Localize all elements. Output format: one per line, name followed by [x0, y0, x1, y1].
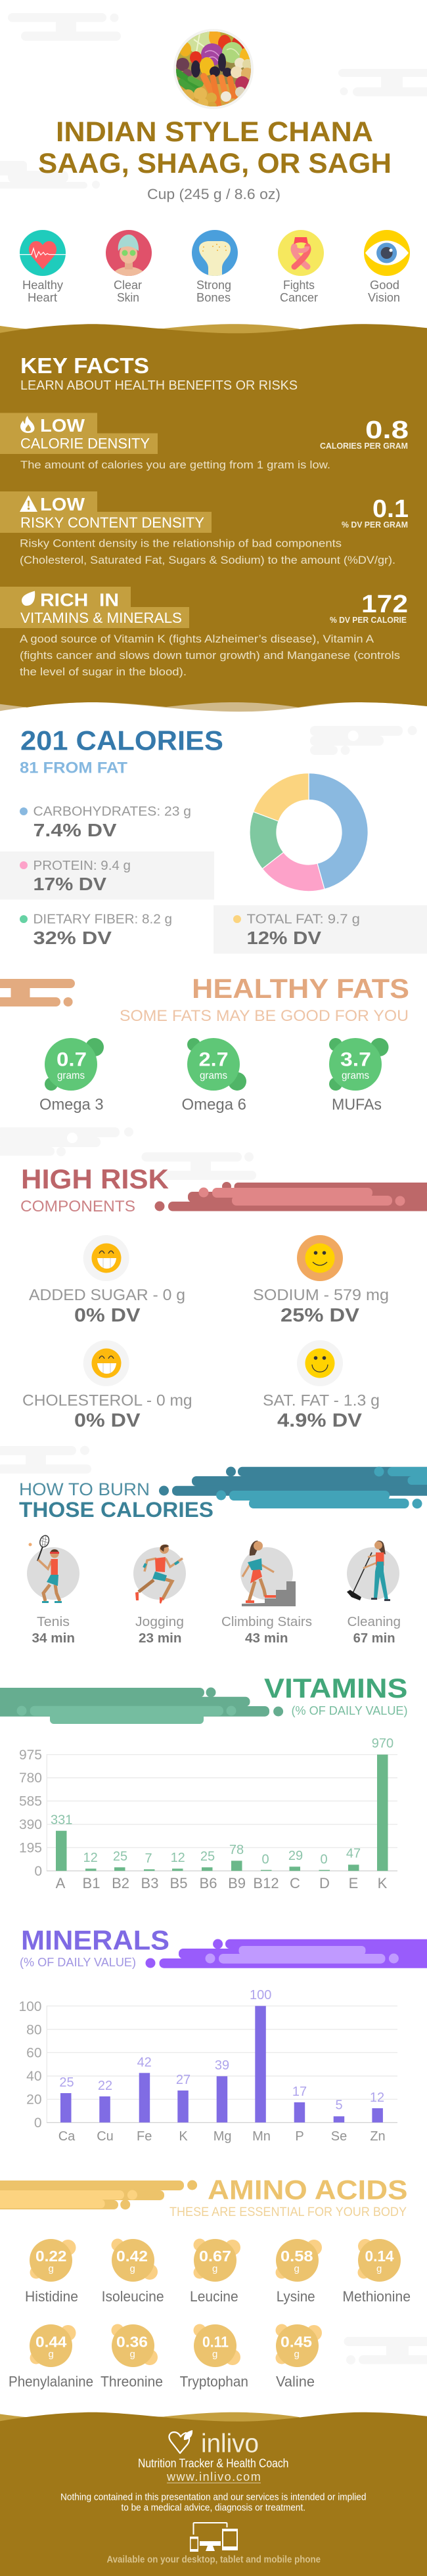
badge: omega 3: Omega 3	[39, 1096, 104, 1114]
heading: 201 calories	[20, 725, 223, 777]
bar chart: minerals: Zn	[370, 2129, 386, 2144]
fact: low calorie density: 0.8	[365, 417, 409, 444]
heading: amino acids	[169, 2175, 407, 2219]
bar chart: vitamins: 29	[288, 1849, 303, 1863]
icon: good vision eye	[364, 230, 410, 276]
activity: climbing stairs	[240, 1541, 296, 1606]
bar chart: minerals: 20	[26, 2092, 42, 2108]
icon: fights cancer ribbon	[278, 230, 324, 276]
bar chart: vitamins: B12	[253, 1875, 279, 1891]
bar chart: vitamins: 7	[145, 1851, 152, 1866]
fact: low risky content density: LOW	[40, 494, 85, 514]
fact: low risky content density	[0, 491, 409, 566]
item: added sugar: ADDED SUGAR - 0 g	[29, 1286, 185, 1304]
badge: histidine: Histidine	[25, 2288, 78, 2305]
heading: high risk: COMPONENTS	[20, 1198, 135, 1215]
activity labels: 34 min	[32, 1631, 75, 1646]
bar chart: vitamins: K	[378, 1875, 388, 1891]
badge: valine: 0.45	[281, 2333, 312, 2350]
bar chart: vitamins: B5	[170, 1875, 187, 1891]
bar chart: minerals: 0	[34, 2115, 42, 2131]
fact: low risky content density: % DV PER GRAM	[342, 520, 408, 530]
bar chart: vitamins: B6	[200, 1875, 217, 1891]
benefit labels: Bones	[196, 291, 231, 304]
panel: amino acids	[0, 2175, 411, 2390]
bar chart: vitamins: E	[349, 1875, 358, 1891]
activity labels: Tenis	[37, 1615, 70, 1629]
badge: isoleucine: g	[130, 2263, 135, 2274]
benefit labels: Clear	[114, 279, 142, 292]
item: added sugar	[29, 1235, 185, 1326]
stat: total fat	[233, 913, 360, 948]
badge: lysine	[276, 2239, 322, 2305]
badge: methionine: Methionine	[342, 2288, 411, 2305]
benefit labels: Heart	[28, 291, 57, 304]
activity labels: Cleaning	[347, 1615, 401, 1629]
footer tagline: Nutrition Tracker & Health Coach	[138, 2457, 288, 2470]
badge: phenylalanine: Phenylalanine	[9, 2374, 93, 2390]
title: SAAG, SHAAG, OR SAGH	[38, 148, 392, 179]
stat: total fat: TOTAL FAT: 9.7 g	[247, 913, 360, 927]
bar chart: vitamins: 12	[83, 1851, 98, 1865]
badge: lysine: g	[294, 2263, 300, 2274]
header graphic	[0, 1687, 283, 1724]
panel: high risk	[20, 1164, 427, 1432]
heading: vitamins: (% OF DAILY VALUE)	[292, 1704, 407, 1717]
badge: leucine: g	[212, 2263, 217, 2274]
item: cholesterol	[22, 1340, 192, 1432]
icon: devices	[190, 2522, 238, 2552]
stat: carbohydrates: 7.4% DV	[33, 820, 117, 840]
stat: carbohydrates: CARBOHYDRATES: 23 g	[33, 805, 191, 819]
stat: dietary fiber	[20, 913, 172, 948]
benefit labels	[22, 279, 400, 304]
header graphic	[0, 979, 75, 1006]
badge: valine: g	[294, 2349, 300, 2360]
heading: high risk: HIGH RISK	[21, 1164, 169, 1194]
benefit labels: Cancer	[280, 291, 318, 304]
bar chart: minerals: 22	[98, 2079, 112, 2093]
heading: amino acids: THESE ARE ESSENTIAL FOR YOUR BODY	[169, 2205, 407, 2219]
badge: omega 3	[39, 1038, 104, 1114]
item: cholesterol: 0% DV	[74, 1411, 141, 1432]
bar chart: minerals: P	[295, 2129, 304, 2144]
bar chart: vitamins: C	[290, 1875, 300, 1891]
badge: leucine	[190, 2239, 240, 2305]
bar chart: minerals: 60	[26, 2046, 42, 2060]
stat: protein: PROTEIN: 9.4 g	[33, 859, 131, 873]
heading: healthy fats: SOME FATS MAY BE GOOD FOR YOU	[120, 1007, 409, 1025]
heading: 201 calories: 81 FROM FAT	[20, 759, 127, 777]
footer	[0, 2412, 427, 2576]
logo: inlivo: inlivo	[201, 2429, 259, 2458]
heading: how to burn: THOSE CALORIES	[19, 1498, 214, 1522]
bar chart: minerals: Cu	[97, 2129, 114, 2144]
benefit labels: Strong	[196, 279, 231, 292]
header graphic	[155, 1182, 427, 1211]
badge: leucine: Leucine	[190, 2288, 238, 2305]
bar chart: vitamins: B1	[83, 1875, 100, 1891]
fact: low calorie density	[0, 413, 409, 471]
panel: calories	[0, 725, 427, 954]
activity labels	[32, 1615, 401, 1646]
header graphic	[146, 1939, 427, 1968]
bar chart: minerals: Mn	[252, 2129, 271, 2144]
activity labels: 43 min	[245, 1631, 288, 1646]
badge: omega 6: grams	[200, 1070, 227, 1081]
badge: omega 6	[181, 1038, 246, 1114]
stat: carbohydrates	[20, 805, 191, 840]
benefit labels: Vision	[368, 291, 400, 304]
activity labels: Climbing Stairs	[221, 1615, 312, 1629]
stat: protein: 17% DV	[33, 874, 106, 894]
fact: rich in vitamins and minerals: A good source of Vitamin K (fights Alzheimer’s disease), Vitamin A	[20, 633, 374, 645]
fact: low calorie density: CALORIES PER GRAM	[320, 441, 408, 451]
bar chart: minerals: 39	[215, 2058, 229, 2073]
benefit labels: Skin	[117, 291, 139, 304]
badge: tryptophan: g	[212, 2349, 217, 2360]
badge: mufas: 3.7	[340, 1049, 371, 1071]
fact: low calorie density: LOW	[40, 415, 85, 436]
bar chart: vitamins: 0	[320, 1853, 328, 1867]
bar chart: minerals: Fe	[137, 2129, 152, 2144]
badge: mufas: MUFAs	[332, 1096, 382, 1114]
item: added sugar: 0% DV	[74, 1305, 141, 1326]
bar chart: vitamins: 390	[19, 1817, 42, 1832]
badge: phenylalanine: g	[49, 2349, 54, 2360]
disclaimer	[60, 2492, 367, 2514]
heading: vitamins	[264, 1673, 407, 1717]
bar chart: minerals: 12	[370, 2090, 384, 2105]
heading: how to burn	[19, 1480, 214, 1522]
health benefits row	[20, 230, 410, 304]
heading: healthy fats: HEALTHY FATS	[192, 973, 409, 1004]
bar chart: minerals: Se	[331, 2129, 347, 2144]
panel: vitamins	[0, 1673, 407, 1891]
bar chart: vitamins	[19, 1736, 397, 1891]
bar chart: vitamins: B9	[228, 1875, 246, 1891]
stat: protein	[20, 859, 131, 894]
fact: low calorie density: CALORIE DENSITY	[20, 435, 150, 452]
badge: valine	[276, 2324, 322, 2390]
benefit labels: Fights	[283, 279, 315, 292]
bar chart: minerals: Ca	[58, 2129, 76, 2144]
badge: isoleucine	[102, 2239, 164, 2305]
bar chart: minerals: 42	[137, 2056, 152, 2070]
bar chart: vitamins: 25	[113, 1849, 127, 1864]
activity: jogging	[133, 1545, 186, 1604]
badge: histidine	[25, 2239, 78, 2305]
heading: minerals: (% OF DAILY VALUE)	[20, 1956, 136, 1969]
badge: omega 3: grams	[57, 1070, 85, 1081]
stat: dietary fiber: 32% DV	[33, 928, 112, 948]
header graphic	[159, 1466, 427, 1508]
bar chart: vitamins: B2	[112, 1875, 129, 1891]
item: sodium	[253, 1235, 389, 1326]
bar chart: vitamins: B3	[141, 1875, 158, 1891]
title: INDIAN STYLE CHANA	[56, 116, 373, 148]
bar chart: vitamins: A	[56, 1875, 66, 1891]
heading: key facts: LEARN ABOUT HEALTH BENEFITS OR RISKS	[20, 378, 298, 393]
bar chart: minerals: 80	[26, 2022, 42, 2038]
activity labels: Jogging	[135, 1615, 184, 1629]
activity: cleaning	[347, 1541, 399, 1601]
badge: threonine	[101, 2324, 163, 2390]
badge: lysine: Lysine	[277, 2288, 315, 2305]
donut chart	[250, 773, 368, 892]
header graphic	[0, 2180, 197, 2209]
disclaimer: Nothing contained in this presentation and our services is intended or implied	[60, 2492, 367, 2503]
badge: threonine: 0.36	[116, 2333, 148, 2350]
fact: low risky content density: Risky Content density is the relationship of bad components	[20, 537, 342, 549]
fact: rich in vitamins and minerals: VITAMINS & MINERALS	[20, 610, 182, 626]
icon: healthy heart	[20, 230, 66, 276]
heading: key facts	[20, 353, 298, 393]
icon: clear skin	[106, 230, 152, 276]
item: saturated fat: 4.9% DV	[277, 1411, 363, 1432]
bar chart: minerals: 25	[59, 2075, 74, 2090]
badge: valine: Valine	[276, 2374, 315, 2390]
panel: healthy fats	[0, 973, 409, 1114]
fact: rich in vitamins and minerals: RICH IN	[40, 590, 119, 610]
bar chart: vitamins: 0	[34, 1864, 42, 1879]
badge: histidine: 0.22	[35, 2248, 67, 2265]
disclaimer: to be a medical advice, diagnosis or treatment.	[121, 2502, 305, 2514]
bar chart: minerals: 40	[26, 2069, 42, 2084]
heading: 201 calories: 201 CALORIES	[20, 725, 223, 756]
fact: low risky content density: (Cholesterol, Saturated Fat, Sugars & Sodium) to the amount (%DV/gr).	[20, 554, 395, 566]
heading: amino acids: AMINO ACIDS	[208, 2175, 407, 2205]
activity labels: 23 min	[139, 1631, 181, 1646]
badge: isoleucine: Isoleucine	[102, 2288, 164, 2305]
panel: how to burn	[19, 1466, 427, 1646]
badge: mufas: grams	[342, 1070, 369, 1081]
badge: omega 6: Omega 6	[181, 1096, 246, 1114]
footer tagline	[138, 2457, 288, 2483]
badge: threonine: Threonine	[101, 2374, 163, 2390]
heading: key facts: KEY FACTS	[20, 353, 149, 378]
badge: lysine: 0.58	[281, 2248, 313, 2265]
badge: phenylalanine	[9, 2324, 93, 2390]
badge: tryptophan: Tryptophan	[180, 2374, 248, 2390]
badge: methionine: 0.14	[365, 2248, 394, 2265]
badge: mufas	[329, 1038, 389, 1114]
bar chart: minerals: 17	[292, 2085, 307, 2099]
bar chart: minerals	[18, 1988, 397, 2144]
bar chart: minerals: Mg	[214, 2129, 231, 2144]
badge: threonine: g	[130, 2349, 135, 2360]
badge: omega 6: 2.7	[199, 1049, 229, 1071]
bar chart: vitamins: 47	[346, 1847, 361, 1861]
bar chart: vitamins: 25	[200, 1849, 215, 1864]
badge: tryptophan	[180, 2324, 248, 2390]
bar chart: vitamins: D	[319, 1875, 330, 1891]
bar chart: vitamins: 780	[19, 1771, 42, 1786]
food photo: vegetables	[173, 28, 254, 111]
fact: rich in vitamins and minerals: 172	[361, 591, 408, 618]
badge: histidine: g	[49, 2263, 54, 2274]
bar chart: vitamins: 975	[19, 1748, 42, 1763]
fact: low calorie density: The amount of calories you are getting from 1 gram is low.	[20, 459, 330, 471]
bar chart: vitamins: 0	[261, 1853, 269, 1867]
serving size: Cup (245 g / 8.6 oz)	[147, 186, 281, 202]
bar chart: vitamins: 585	[19, 1794, 42, 1809]
heading: how to burn: HOW TO BURN	[19, 1480, 150, 1499]
item: saturated fat: SAT. FAT - 1.3 g	[263, 1391, 380, 1409]
heading: high risk	[20, 1164, 169, 1215]
stat: total fat: 12% DV	[247, 928, 321, 948]
fact: rich in vitamins and minerals: (fights cancer and slows down tumor growth) and Manganese (controls	[20, 650, 400, 662]
heading: minerals	[20, 1925, 169, 1969]
heading: minerals: MINERALS	[21, 1925, 169, 1955]
bar chart: vitamins: 78	[229, 1843, 244, 1857]
availability note: Available on your desktop, tablet and mobile phone	[106, 2554, 321, 2565]
fact: low risky content density: RISKY CONTENT DENSITY	[20, 514, 204, 531]
badge: tryptophan: 0.11	[202, 2333, 229, 2350]
item: sodium: SODIUM - 579 mg	[253, 1286, 389, 1304]
badge: isoleucine: 0.42	[116, 2248, 148, 2265]
title	[38, 116, 392, 179]
activity labels: 67 min	[353, 1631, 395, 1646]
bar chart: minerals: 27	[176, 2073, 191, 2087]
badge: leucine: 0.67	[199, 2248, 231, 2265]
activity: tennis	[27, 1534, 79, 1603]
logo: inlivo	[169, 2429, 259, 2458]
fact: low risky content density: 0.1	[372, 495, 409, 523]
fact: rich in vitamins and minerals	[0, 587, 408, 678]
fact: rich in vitamins and minerals: % DV PER CALORIE	[330, 616, 407, 625]
bar chart: minerals: 5	[335, 2098, 343, 2113]
item: sodium: 25% DV	[281, 1305, 360, 1326]
item: cholesterol: CHOLESTEROL - 0 mg	[22, 1391, 192, 1409]
badge: methionine	[342, 2239, 411, 2305]
stat: dietary fiber: DIETARY FIBER: 8.2 g	[33, 913, 172, 927]
footer tagline: www.inlivo.com	[166, 2470, 261, 2483]
bar chart: vitamins: 195	[19, 1841, 42, 1855]
bar chart: vitamins: 331	[51, 1813, 72, 1828]
bar chart: minerals: 100	[250, 1988, 271, 2002]
bar chart: minerals: 100	[18, 1999, 42, 2014]
bar chart: vitamins: 970	[372, 1736, 393, 1751]
icon: strong bones	[192, 230, 238, 277]
heading: healthy fats	[120, 973, 409, 1025]
badge: phenylalanine: 0.44	[35, 2333, 67, 2350]
badge: methionine: g	[376, 2263, 382, 2274]
fact: rich in vitamins and minerals: the level of sugar in the blood).	[20, 666, 187, 678]
bar chart: vitamins: 12	[171, 1851, 185, 1865]
benefit labels: Healthy	[22, 279, 63, 292]
bar chart: minerals: K	[179, 2129, 188, 2144]
panel: minerals	[18, 1925, 427, 2144]
item: saturated fat	[263, 1340, 380, 1432]
panel: key facts	[0, 324, 427, 712]
badge: omega 3: 0.7	[56, 1049, 87, 1071]
benefit labels: Good	[370, 279, 399, 292]
heading: vitamins: VITAMINS	[264, 1673, 407, 1704]
